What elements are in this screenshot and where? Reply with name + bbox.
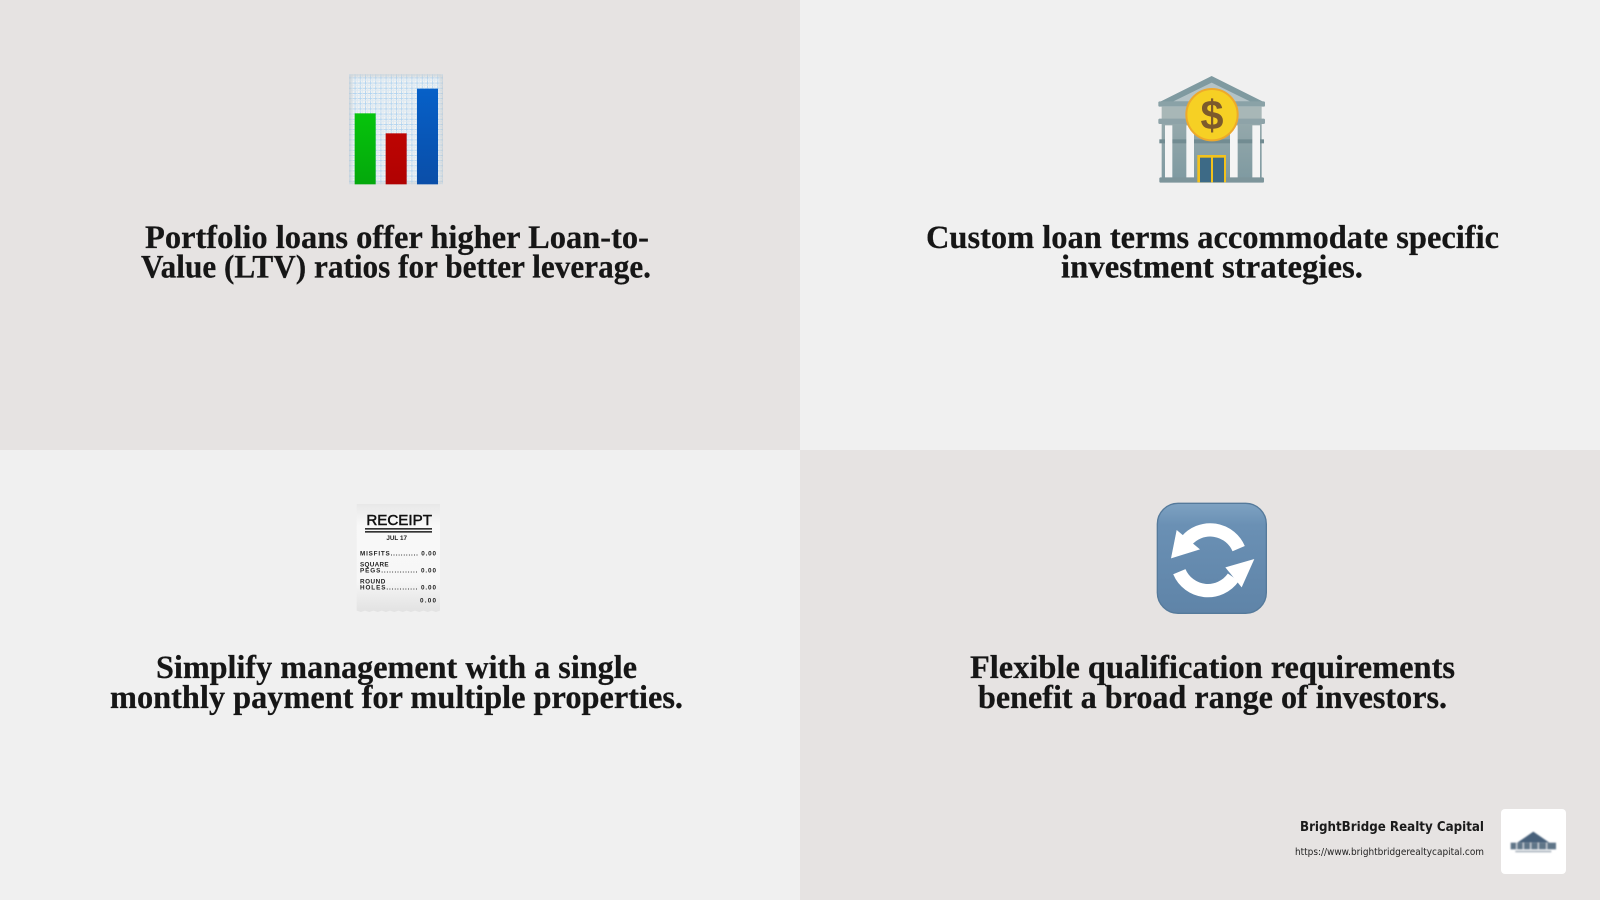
icon: bar chart <box>349 74 443 184</box>
icon: bank with dollar coin: $ <box>1200 92 1223 138</box>
icon: refresh arrows <box>1157 503 1266 613</box>
icon: receipt: HOLES............ 0.00 <box>360 585 436 592</box>
footer: company name: BrightBridge Realty Capital <box>1300 819 1484 835</box>
heading: higher LTV ratios: Value (LTV) ratios for better leverage. <box>141 250 651 286</box>
footer: logo <box>1501 809 1566 874</box>
panel: top left background <box>0 0 800 450</box>
icon: bank with dollar coin <box>1158 76 1265 183</box>
icon: receipt: ROUND <box>360 579 386 586</box>
heading: flexible qualification: Flexible qualification requirements <box>970 650 1455 686</box>
footer: website url: https://www.brightbridgerealtycapital.com <box>1295 847 1484 858</box>
heading: single monthly payment <box>110 650 683 716</box>
icon: receipt: SQUARE <box>360 561 389 568</box>
icon: receipt: PEGS.............. 0.00 <box>360 567 436 574</box>
icon: receipt <box>357 504 440 612</box>
heading: flexible qualification <box>970 650 1455 716</box>
heading: custom loan terms: investment strategies. <box>1061 250 1363 286</box>
heading: single monthly payment: monthly payment for multiple properties. <box>110 680 683 716</box>
icon: receipt: 0.00 <box>420 597 436 604</box>
panel: bottom left background <box>0 450 800 900</box>
panel: bottom right background <box>800 450 1600 900</box>
icon: receipt: MISFITS........... 0.00 <box>360 550 436 557</box>
icon: receipt: JUL 17 <box>386 535 407 542</box>
heading: higher LTV ratios <box>141 220 651 286</box>
heading: higher LTV ratios: Portfolio loans offer higher Loan-to- <box>145 220 649 256</box>
panel: top right background <box>800 0 1600 450</box>
heading: flexible qualification: benefit a broad range of investors. <box>978 680 1447 716</box>
heading: custom loan terms <box>926 220 1499 286</box>
heading: single monthly payment: Simplify management with a single <box>156 650 637 686</box>
heading: custom loan terms: Custom loan terms accommodate specific <box>926 220 1499 256</box>
icon: receipt: RECEIPT <box>366 512 432 529</box>
